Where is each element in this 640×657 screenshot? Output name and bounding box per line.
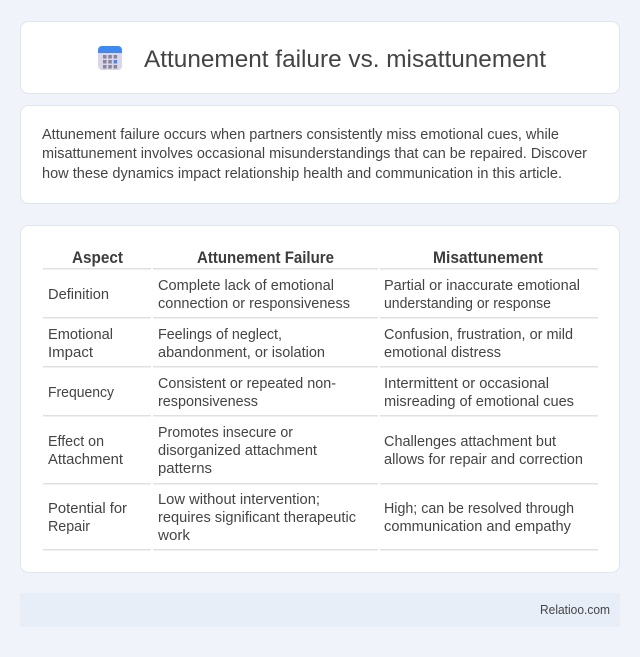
title: Attunement failure vs. misattunement <box>144 46 546 73</box>
row: frequency: Intermittent or occasional <box>384 376 549 392</box>
row: emotional impact: Impact <box>48 345 93 361</box>
row: potential for repair: requires significant therapeutic <box>158 510 356 526</box>
row: potential for repair: communication and empathy <box>384 519 572 535</box>
row: emotional impact: Emotional <box>48 327 113 343</box>
row: potential for repair: work <box>157 528 191 544</box>
row: potential for repair: High; can be resolved through <box>384 501 574 517</box>
row: effect on attachment: Challenges attachment but <box>384 434 556 450</box>
row: emotional impact: abandonment, or isolation <box>158 345 325 361</box>
row: definition: Definition <box>48 287 109 303</box>
row: potential for repair: Repair <box>48 519 90 535</box>
table header: Misattunement <box>433 249 543 267</box>
row: definition: understanding or response <box>384 296 551 312</box>
intro text <box>42 127 587 182</box>
row: effect on attachment <box>48 425 583 477</box>
row: effect on attachment: patterns <box>158 461 212 477</box>
row: frequency: responsiveness <box>158 394 258 410</box>
row: emotional impact: Feelings of neglect, <box>158 327 282 343</box>
table header: Aspect <box>72 249 123 267</box>
row: effect on attachment: Attachment <box>48 452 123 468</box>
table header: Attunement Failure <box>197 249 334 267</box>
row: emotional impact: Confusion, frustration, or mild <box>384 327 573 343</box>
row: frequency <box>48 376 574 410</box>
row: effect on attachment: Effect on <box>48 434 104 450</box>
footer bar <box>20 593 620 627</box>
intro text: misattunement involves occasional misunderstandings that can be repaired. Discover <box>42 146 587 162</box>
row: potential for repair <box>48 492 574 544</box>
table header <box>72 249 543 267</box>
intro text: how these dynamics impact relationship health and communication in this article. <box>42 166 562 182</box>
row: effect on attachment: allows for repair and correction <box>384 452 583 468</box>
comparison table card <box>20 226 620 572</box>
row: potential for repair: Low without intervention; <box>158 492 320 508</box>
row: effect on attachment: disorganized attachment <box>158 443 317 459</box>
footer credit: Relatioo.com <box>540 603 610 617</box>
title card <box>20 22 620 94</box>
row: frequency: Frequency <box>48 385 115 401</box>
intro card <box>20 106 620 204</box>
row: frequency: misreading of emotional cues <box>384 394 574 410</box>
row: definition: Complete lack of emotional <box>158 278 334 294</box>
icon: calendar <box>98 46 122 70</box>
row: frequency: Consistent or repeated non- <box>158 376 336 392</box>
row: definition: Partial or inaccurate emotional <box>384 278 580 294</box>
row: emotional impact: emotional distress <box>384 345 501 361</box>
row: definition <box>48 278 580 312</box>
row: effect on attachment: Promotes insecure or <box>158 425 293 441</box>
intro text: Attunement failure occurs when partners consistently miss emotional cues, while <box>42 127 559 143</box>
row: emotional impact <box>48 327 573 361</box>
row: potential for repair: Potential for <box>48 501 127 517</box>
row: definition: connection or responsiveness <box>158 296 350 312</box>
